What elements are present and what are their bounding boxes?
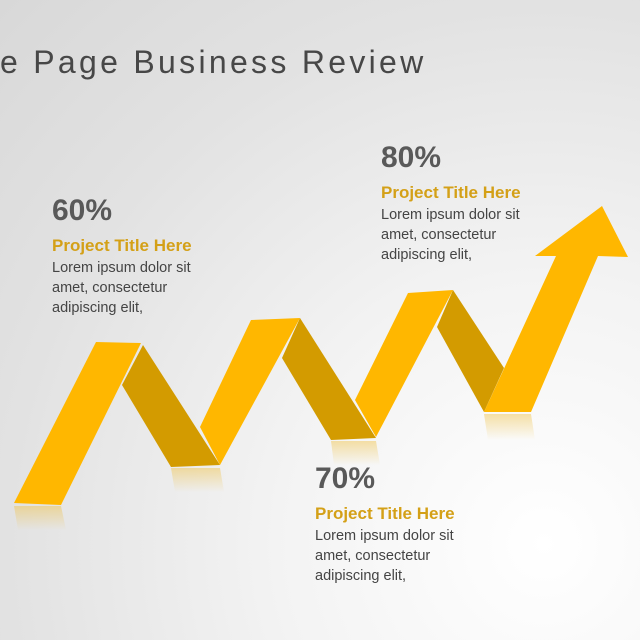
text block: 70%: Project Title Here (315, 504, 455, 523)
text block: 70%: Lorem ipsum dolor sit (315, 528, 454, 544)
text block: 70%: amet, consectetur (315, 548, 430, 564)
text block: 60%: 60% (52, 194, 112, 227)
text block: 70%: adipiscing elit, (315, 568, 406, 584)
text block: 80%: adipiscing elit, (381, 247, 472, 263)
text block: 80%: 80% (381, 141, 441, 174)
text block: 70%: 70% (315, 462, 375, 495)
text block: 80%: Lorem ipsum dolor sit (381, 207, 520, 223)
text block: 60%: amet, consectetur (52, 280, 167, 296)
text block: 60%: Project Title Here (52, 236, 192, 255)
text block: 70% (315, 462, 455, 584)
text block: 80% (381, 141, 521, 263)
text block: 80%: Project Title Here (381, 183, 521, 202)
text block: 80%: amet, consectetur (381, 227, 496, 243)
text block: 60% (52, 194, 192, 316)
text block: 60%: Lorem ipsum dolor sit (52, 260, 191, 276)
text block: 60%: adipiscing elit, (52, 300, 143, 316)
title: e Page Business Review (0, 44, 427, 80)
